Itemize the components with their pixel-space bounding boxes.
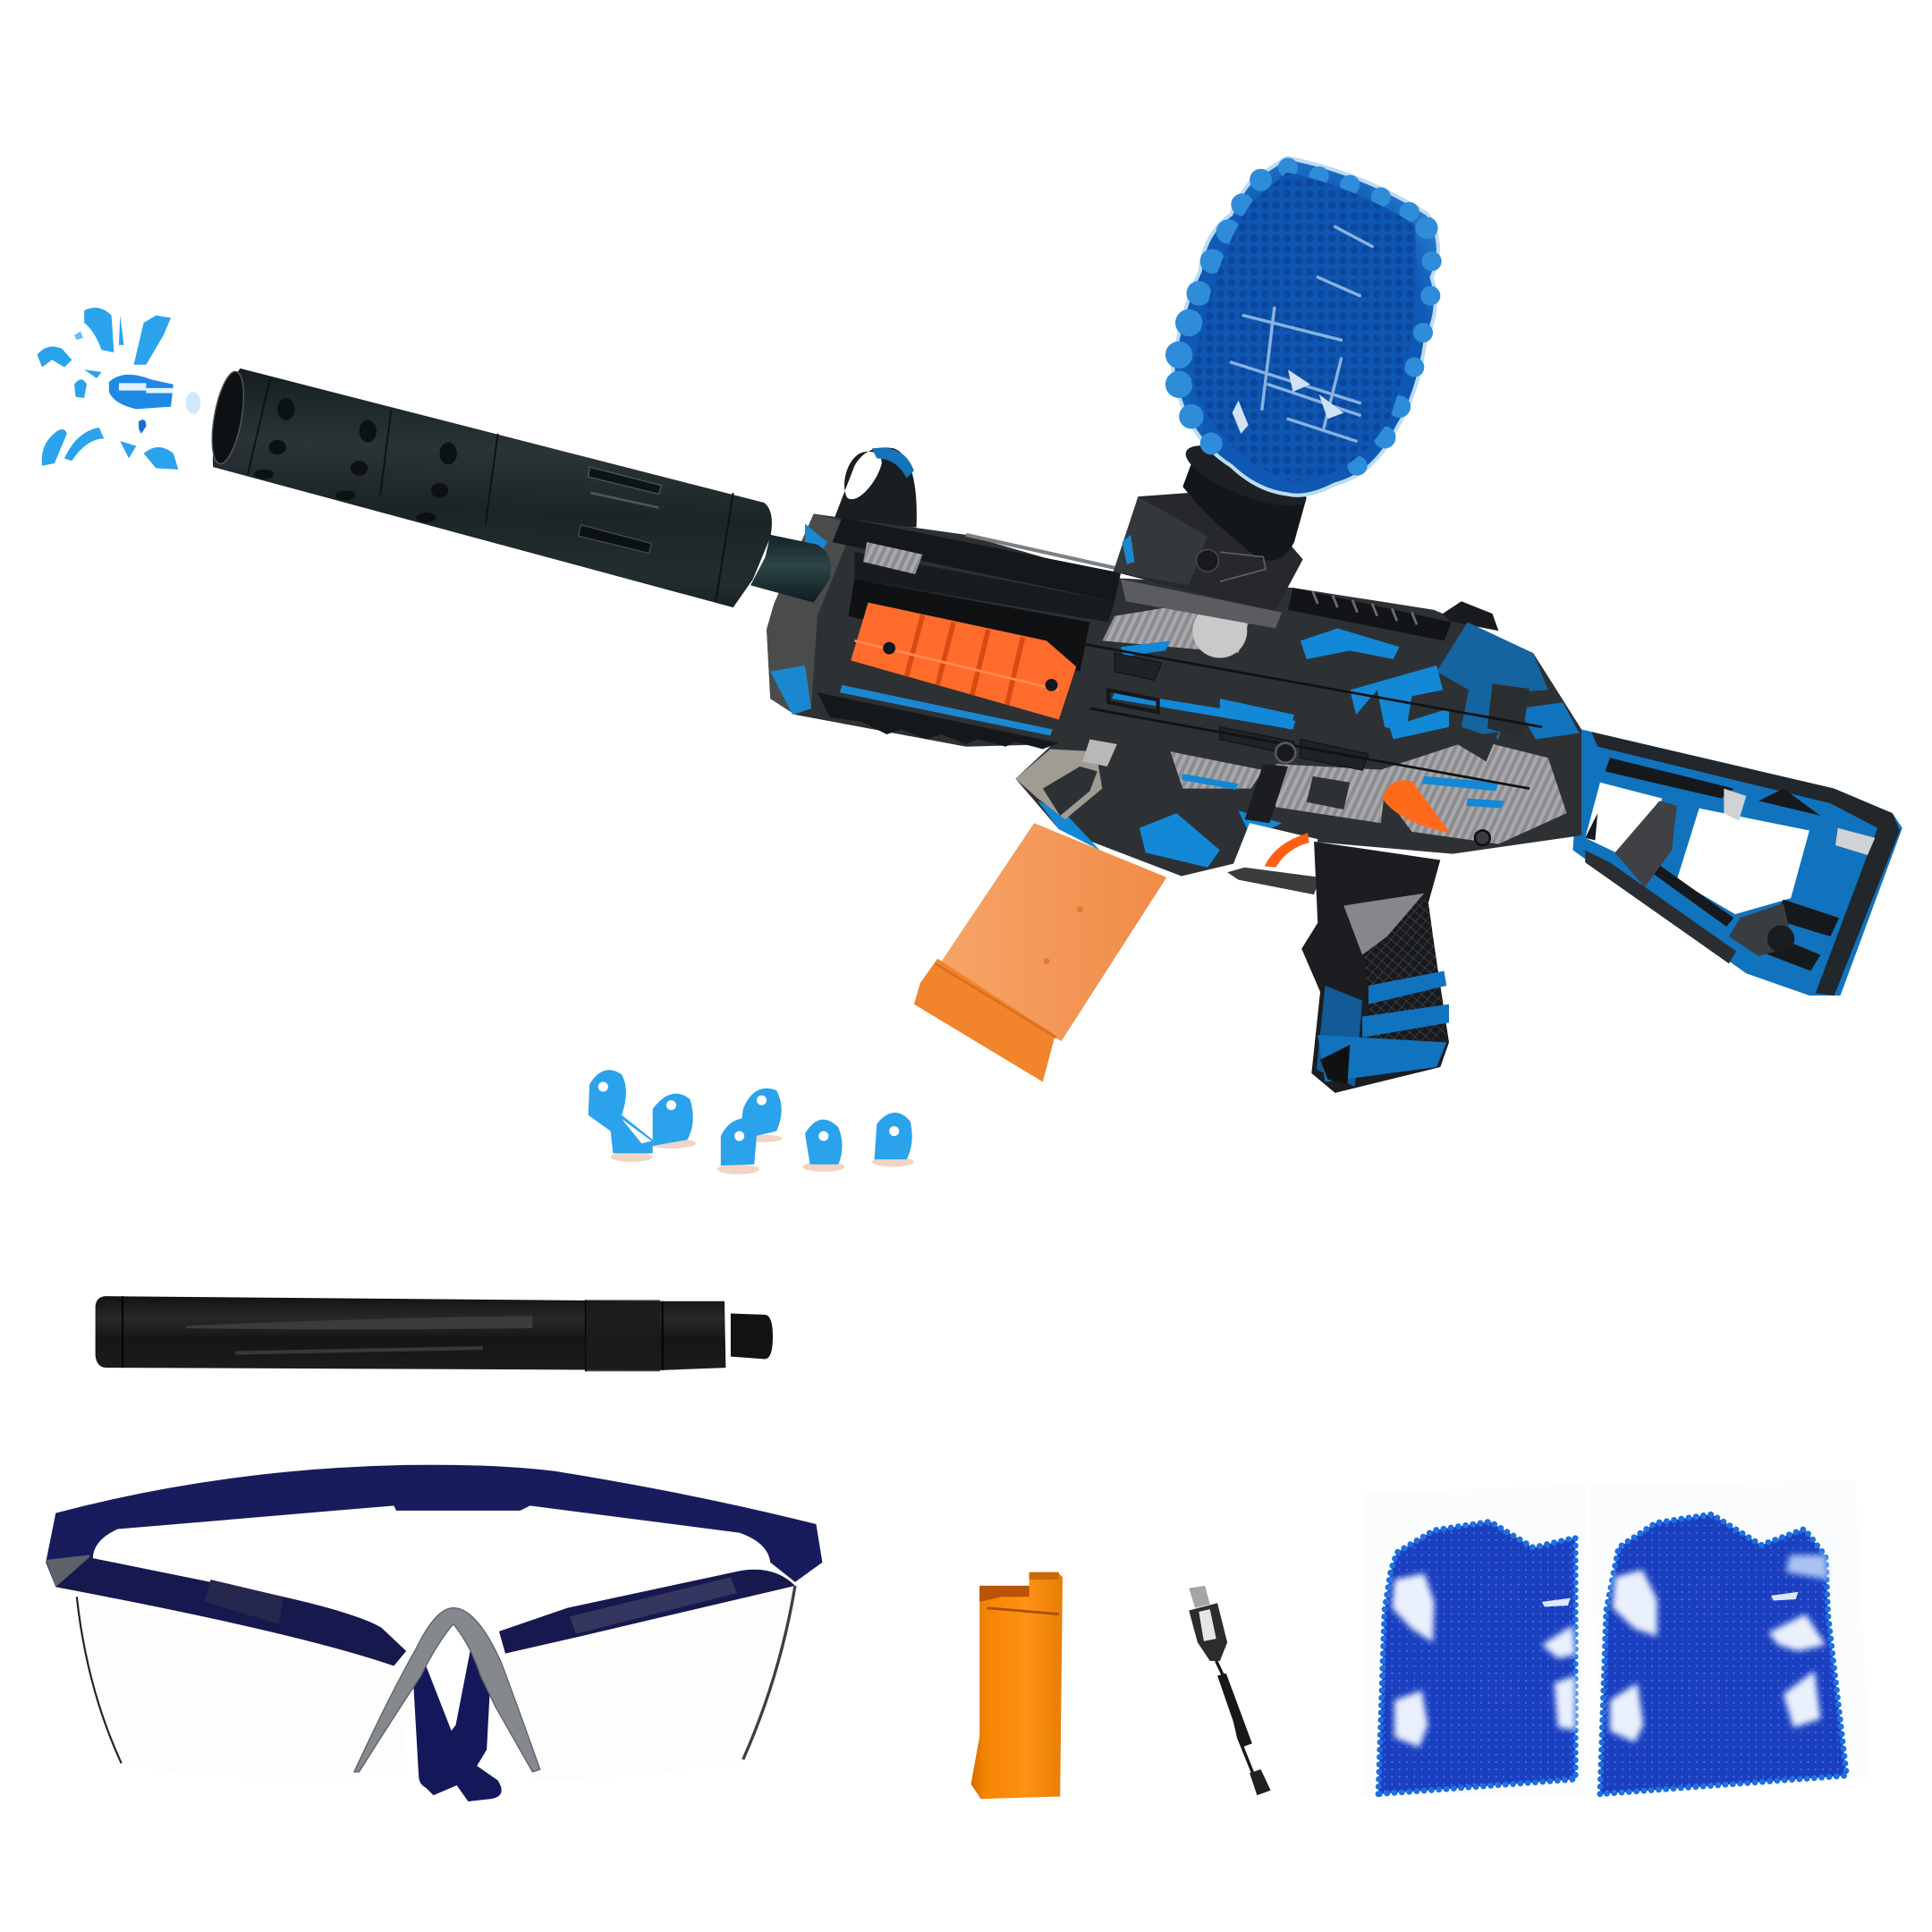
gel bead refill bags [1362, 1479, 1870, 1796]
recess above orange rail [848, 579, 1089, 672]
orange trigger [1265, 833, 1309, 868]
blaster body [767, 447, 1581, 894]
safety goggles [46, 1465, 822, 1801]
spare silencer accessory [96, 1296, 773, 1371]
brow frame [55, 1557, 406, 1665]
USB charging cable [1189, 1586, 1271, 1795]
lower rail teeth [818, 692, 1059, 750]
lens edges [77, 1597, 122, 1763]
nose bridge [354, 1608, 540, 1772]
orange fire selector [1382, 780, 1450, 833]
left bag [1378, 1521, 1575, 1794]
front sight ring [832, 447, 917, 528]
stock of the blaster [1572, 730, 1902, 996]
rear sight [1443, 601, 1498, 631]
pistol grip [1301, 842, 1449, 1093]
clear lenses [77, 1597, 409, 1779]
orange accessory rail [851, 603, 1076, 719]
receiver silhouette [767, 513, 1581, 876]
handguard front cap [767, 513, 854, 715]
right bag [1600, 1514, 1846, 1794]
head strap [46, 1465, 822, 1587]
magazine [914, 823, 1166, 1081]
recessed slots and pins [1108, 690, 1158, 712]
top rail [832, 518, 1121, 601]
water splash from muzzle [38, 308, 200, 470]
folded arms [412, 1665, 502, 1801]
rear upper blue corner [1436, 623, 1548, 740]
detachable silencer fitted to the barrel [207, 369, 772, 607]
trigger guard opening [1233, 823, 1318, 876]
spare orange battery [971, 1572, 1063, 1799]
hopper neck and mount [1114, 433, 1313, 629]
carbon fibre panels [1102, 604, 1250, 653]
grenade hopper full of gel beads [1165, 157, 1442, 496]
magwell front lip [1015, 750, 1102, 819]
blue paint stripes [1038, 629, 1504, 868]
top serrated rail [1288, 588, 1452, 640]
gel ball targets [589, 1070, 914, 1174]
inner barrel between silencer and handguard [750, 535, 831, 603]
